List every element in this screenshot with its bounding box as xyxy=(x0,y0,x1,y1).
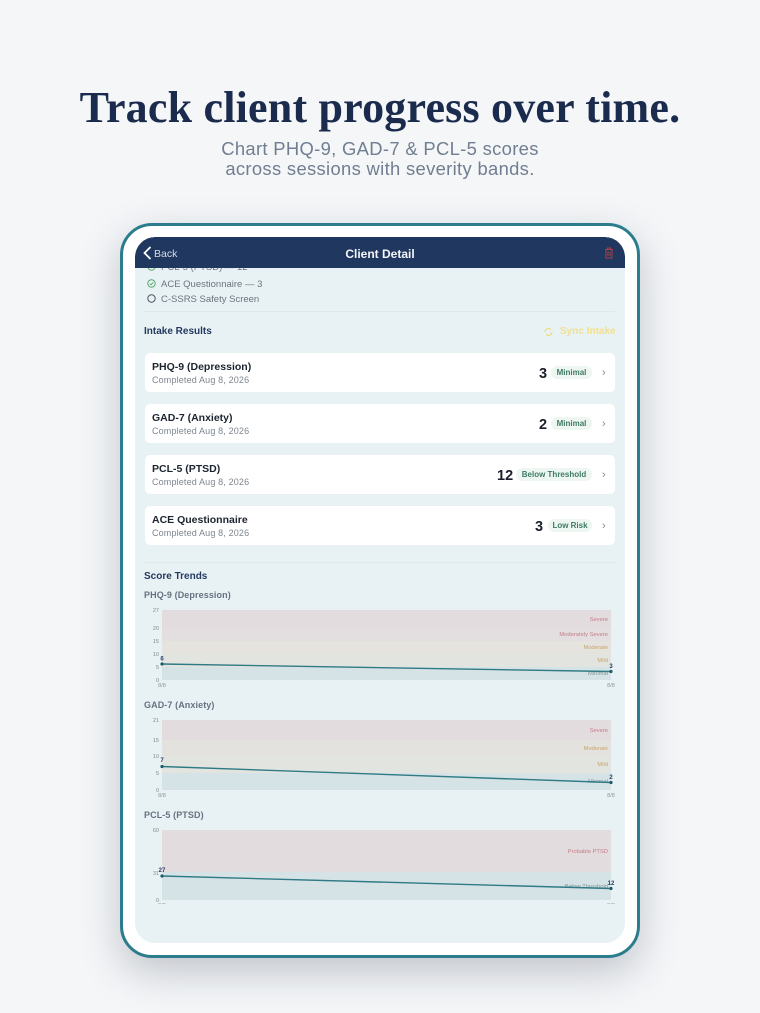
chart: PHQ-9 trend: 6 xyxy=(160,656,164,662)
chart title: PCL-5: PCL-5 (PTSD) xyxy=(144,810,204,820)
chart: PCL-5 trend: 12 xyxy=(608,881,615,887)
card: ACE: Low Risk xyxy=(552,521,588,530)
card: PHQ-9: 3 xyxy=(539,366,547,382)
card: PCL-5: › xyxy=(602,469,606,481)
chart: PHQ-9 trend: Moderate xyxy=(584,645,608,651)
card: PHQ-9: › xyxy=(602,367,606,379)
back button: Back xyxy=(154,248,177,260)
chart: PCL-5 trend xyxy=(153,828,615,904)
chart title: GAD-7: GAD-7 (Anxiety) xyxy=(144,700,215,710)
chart: GAD-7 trend: 2 xyxy=(609,775,613,781)
chart: PHQ-9 trend: 27 xyxy=(153,608,159,614)
card: PHQ-9: Minimal xyxy=(557,368,586,377)
title: Track client progress over time. xyxy=(80,83,680,132)
heading: score trends: Score Trends xyxy=(144,571,207,582)
chart: PHQ-9 trend: Mild xyxy=(597,658,608,664)
chart: GAD-7 trend: 15 xyxy=(153,738,159,744)
chart: PCL-5 trend: 27 xyxy=(159,868,166,874)
card: PCL-5: Completed Aug 8, 2026 xyxy=(152,477,249,487)
chart: GAD-7 trend: Minimal xyxy=(588,779,608,785)
chart: GAD-7 trend: 5 xyxy=(156,771,159,777)
icon: empty circle xyxy=(147,294,156,303)
chart: PHQ-9 trend: 8/8 xyxy=(158,683,166,689)
checklist item: ACE: ACE Questionnaire — 3 xyxy=(161,279,262,290)
chart: GAD-7 trend: Moderate xyxy=(584,746,608,752)
card: ACE: ACE Questionnaire xyxy=(152,514,248,526)
chart: PHQ-9 trend: 20 xyxy=(153,626,159,632)
card: GAD-7: GAD-7 (Anxiety) xyxy=(152,412,233,424)
chart: PHQ-9 trend: Moderately Severe xyxy=(559,632,608,638)
chart: PCL-5 trend: Probable PTSD xyxy=(568,849,608,855)
back button xyxy=(143,246,178,260)
chart: PCL-5 trend: 31 xyxy=(153,871,159,877)
card: PHQ-9: PHQ-9 (Depression) xyxy=(152,360,251,372)
chart: PHQ-9 trend: 10 xyxy=(153,652,159,658)
checklist item: C-SSRS: C-SSRS Safety Screen xyxy=(161,294,259,305)
app screen xyxy=(135,237,625,943)
chart: GAD-7 trend: 8/8 xyxy=(158,793,166,799)
card: GAD-7: 2 xyxy=(539,416,547,432)
subtitle: Chart PHQ-9, GAD-7 & PCL-5 scores xyxy=(221,138,539,159)
card: PCL-5: Below Threshold xyxy=(522,470,586,479)
chart: PHQ-9 trend: Minimal xyxy=(588,671,608,677)
card: PHQ-9: Completed Aug 8, 2026 xyxy=(152,375,249,385)
card: ACE xyxy=(145,506,615,545)
chart: GAD-7 trend: 21 xyxy=(153,718,159,724)
card: ACE: 3 xyxy=(535,518,543,534)
chart: GAD-7 trend: 10 xyxy=(153,754,159,760)
chart: PHQ-9 trend: 5 xyxy=(156,665,159,671)
chart title: PHQ-9: PHQ-9 (Depression) xyxy=(144,590,231,600)
icon: check ACE xyxy=(147,279,156,288)
chart: GAD-7 trend: 8/8 xyxy=(607,793,615,799)
chart: PHQ-9 trend: 0 xyxy=(156,678,159,684)
chart: GAD-7 trend: Mild xyxy=(597,762,608,768)
chart: GAD-7 trend: 7 xyxy=(160,758,164,764)
icon: check PCL-5 xyxy=(148,268,156,271)
card: PHQ-9 xyxy=(145,353,615,392)
card: PCL-5: PCL-5 (PTSD) xyxy=(152,462,220,474)
chart: PCL-5 trend: Below Threshold xyxy=(565,884,608,890)
icon: trash xyxy=(605,248,613,258)
heading: intake results: Intake Results xyxy=(144,326,212,337)
card: GAD-7: Completed Aug 8, 2026 xyxy=(152,426,249,436)
card: GAD-7 xyxy=(145,404,615,443)
tablet device frame xyxy=(120,223,640,958)
chart: PHQ-9 trend: 8/8 xyxy=(607,683,615,689)
card: ACE: › xyxy=(602,520,606,532)
card: ACE: Completed Aug 8, 2026 xyxy=(152,528,249,538)
navigation header xyxy=(135,237,625,268)
chart: GAD-7 trend: Severe xyxy=(590,728,608,734)
sync intake button: Sync Intake xyxy=(560,326,616,337)
chart: GAD-7 trend xyxy=(153,718,615,799)
subtitle: across sessions with severity bands. xyxy=(225,158,535,179)
chart: PCL-5 trend: 60 xyxy=(153,828,159,834)
chart: PHQ-9 trend: 15 xyxy=(153,639,159,645)
chart: PHQ-9 trend: Severe xyxy=(590,617,608,623)
card: GAD-7: Minimal xyxy=(557,419,586,428)
screen title: Client Detail xyxy=(345,246,415,260)
subtitle xyxy=(221,138,539,179)
card: GAD-7: › xyxy=(602,418,606,430)
card: PCL-5 xyxy=(145,455,615,494)
card: PCL-5: 12 xyxy=(497,468,513,484)
chart: PHQ-9 trend: 3 xyxy=(609,664,613,670)
intake checklist xyxy=(147,268,262,305)
chart: PCL-5 trend: 0 xyxy=(156,898,159,904)
chart: PHQ-9 trend xyxy=(153,608,615,689)
chart: GAD-7 trend: 0 xyxy=(156,788,159,794)
